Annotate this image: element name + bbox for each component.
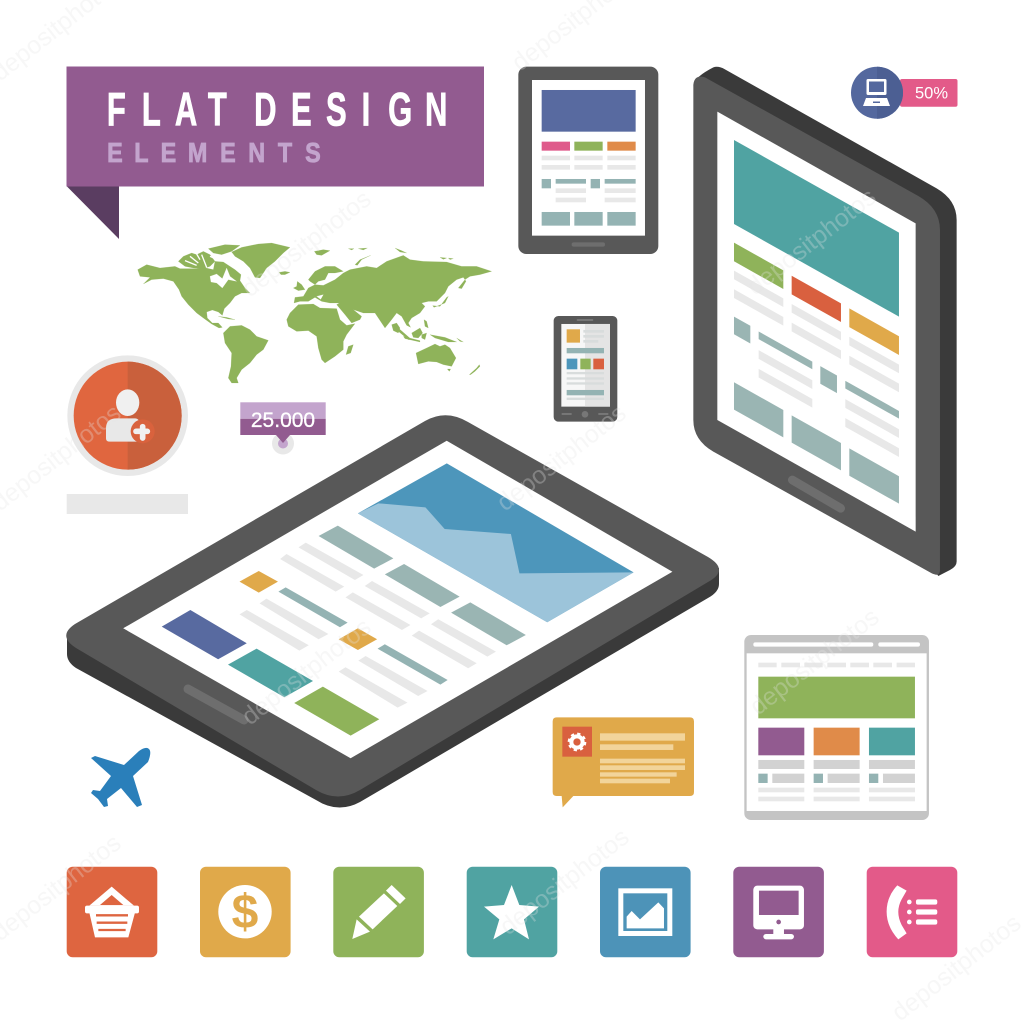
New Zealand — [469, 365, 480, 375]
small portrait tablet — [518, 67, 658, 254]
area chart fill — [358, 503, 634, 622]
watermark: depositphotos — [236, 613, 376, 731]
icon tile: monitor — [733, 867, 824, 957]
tablet screen — [123, 441, 672, 758]
Black Sea — [317, 295, 323, 299]
circle shade — [877, 67, 903, 119]
slate elements — [734, 317, 899, 504]
watermark: depositphotos — [236, 185, 376, 303]
Caribbean islands — [218, 316, 235, 320]
watermark: depositphotos — [744, 603, 884, 721]
bubble text lines — [600, 733, 685, 783]
grey caption bar — [67, 494, 188, 514]
watermark: depositphotos — [741, 183, 881, 301]
watermark: depositphotos — [494, 823, 634, 941]
orange diamonds — [240, 571, 377, 650]
pencil glyph — [352, 885, 406, 939]
tile — [600, 867, 691, 957]
Arctic islands — [178, 245, 240, 269]
pink tag — [900, 79, 958, 107]
green hero — [758, 677, 915, 718]
map pin tag 25.000 — [240, 402, 326, 454]
pin dot — [278, 438, 288, 448]
disc shade — [128, 362, 182, 470]
heading: flat design: FLATDESIGN — [107, 84, 447, 136]
tablet body — [518, 67, 658, 254]
Eurasia — [294, 255, 492, 328]
large isometric landscape tablet — [66, 415, 719, 808]
tag bottom half — [240, 419, 326, 435]
home button — [792, 480, 841, 508]
pin pointer — [276, 435, 290, 443]
world map — [138, 243, 492, 383]
South America — [223, 325, 268, 383]
Greenland — [232, 243, 290, 278]
page layout — [162, 463, 634, 736]
window frame — [744, 635, 929, 820]
colour tiles — [567, 359, 604, 369]
bubble body — [553, 717, 694, 807]
percent label: 50% — [915, 84, 948, 102]
outer ring — [67, 355, 188, 476]
navigation items — [758, 663, 915, 667]
watermark: depositphotos — [491, 399, 631, 517]
Australia — [416, 344, 456, 371]
teal block — [228, 649, 313, 697]
text lines — [734, 271, 899, 457]
monitor glyph — [753, 886, 804, 939]
map: Eurasia, Africa and Oceania — [287, 248, 492, 375]
Hudson Bay — [210, 268, 237, 288]
blue block — [162, 610, 247, 659]
icon tile: picture — [600, 867, 691, 957]
browser window — [744, 635, 929, 820]
tile — [733, 867, 824, 957]
phone body — [554, 316, 617, 422]
settings tile — [562, 727, 592, 757]
home button — [572, 242, 605, 247]
text lines — [542, 156, 636, 202]
icon tile: star — [467, 867, 557, 957]
column labels — [758, 760, 915, 783]
star glyph — [484, 885, 539, 939]
window page — [747, 653, 927, 811]
coin — [218, 885, 272, 938]
skewed page layout — [734, 140, 899, 504]
phone controls — [562, 319, 608, 418]
slate header blocks — [278, 526, 526, 685]
small slate squares — [758, 774, 878, 783]
home button — [188, 689, 244, 720]
blue circle — [851, 67, 903, 119]
Madagascar — [346, 345, 353, 355]
Japan and Sakhalin — [433, 280, 466, 307]
laptop badge 50% — [851, 67, 958, 119]
speech bubble — [553, 717, 694, 807]
tile — [867, 867, 957, 957]
hero block — [542, 90, 636, 132]
Arctic Ocean islands — [314, 248, 453, 265]
icon: user plus — [106, 389, 155, 443]
British Isles — [293, 281, 305, 291]
column text lines — [758, 788, 915, 801]
Arctic island channels — [185, 254, 215, 267]
tablet face — [66, 415, 719, 796]
hero block — [734, 140, 899, 317]
three colour tiles — [758, 728, 915, 755]
tag number: 25.000 — [251, 409, 315, 432]
screen shaded half — [585, 324, 610, 407]
banner ribbon — [66, 66, 484, 186]
tablet side — [67, 568, 719, 808]
icon tile: basket — [67, 867, 157, 957]
icon: airplane — [91, 748, 150, 807]
banner fold — [66, 186, 119, 239]
phone screen — [561, 324, 610, 407]
North America — [138, 261, 250, 328]
Iceland — [279, 271, 290, 275]
red disc — [74, 362, 182, 470]
map: Americas and Greenland — [138, 243, 290, 383]
South-East Asian islands — [392, 320, 463, 342]
phone glyph — [887, 885, 937, 939]
pin circle — [272, 432, 294, 454]
Africa — [287, 304, 355, 363]
tablet side — [693, 67, 957, 576]
tag top half — [240, 402, 326, 419]
tablet screen — [717, 112, 916, 532]
icon: gear — [569, 734, 585, 750]
tile — [67, 867, 157, 957]
picture glyph — [618, 888, 672, 936]
phone text lines — [567, 330, 604, 400]
icon tile: pencil — [333, 867, 424, 957]
coloured header row — [542, 142, 636, 151]
address bars — [753, 642, 920, 647]
icon tile: dollar — [200, 867, 291, 957]
grey text lines — [240, 543, 496, 708]
tile — [333, 867, 424, 957]
area chart background — [358, 463, 634, 622]
large isometric upright tablet — [693, 67, 957, 576]
subheading: elements: ELEMENTS — [107, 138, 321, 168]
icon: laptop — [863, 79, 890, 106]
tile — [200, 867, 291, 957]
orange tile — [567, 329, 580, 343]
title banner — [66, 66, 484, 239]
green block — [294, 687, 379, 736]
slate bars — [567, 348, 604, 395]
dollar sign: $ — [232, 886, 259, 939]
smartphone — [554, 316, 617, 422]
add user circle — [67, 355, 188, 476]
slate squares and blocks — [542, 179, 636, 226]
colour headers — [734, 243, 899, 355]
tablet face — [693, 77, 940, 575]
basket glyph — [85, 887, 139, 937]
tablet screen — [532, 80, 645, 236]
Scandinavia — [308, 266, 343, 285]
tile — [467, 867, 557, 957]
icon tile: phone list — [867, 867, 957, 957]
